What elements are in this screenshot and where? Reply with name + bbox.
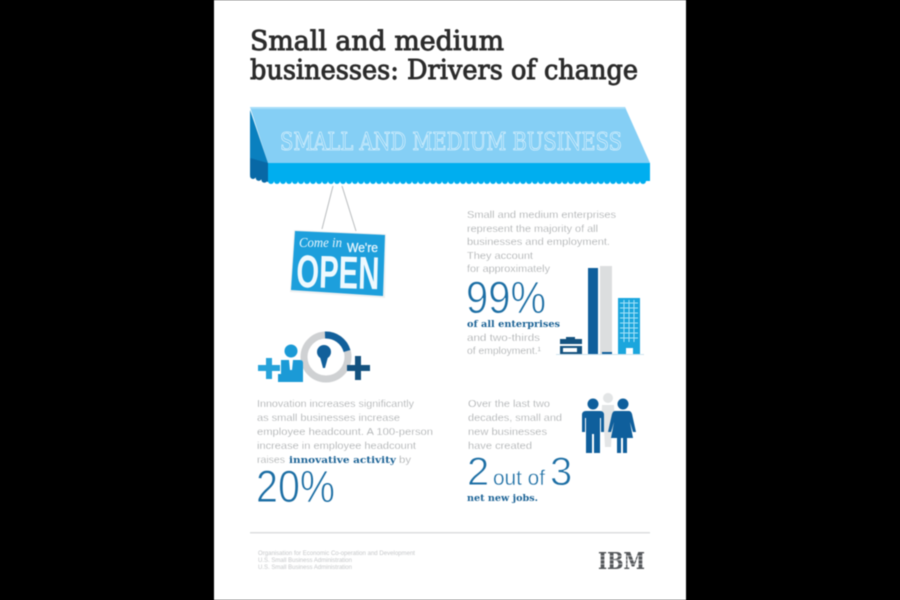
title: Small and medium xyxy=(250,26,504,57)
text: job creation xyxy=(468,398,562,452)
white page panel xyxy=(214,0,686,600)
stat: 2 out of 3: 3 xyxy=(550,450,572,494)
stat label: innovative activity: innovative activity xyxy=(289,455,397,466)
IBM logo: IBM xyxy=(598,548,645,575)
text: enterprises intro xyxy=(467,209,616,275)
text: innovation: raises xyxy=(257,454,285,466)
title xyxy=(250,26,638,86)
text: enterprises intro: for approximately xyxy=(467,263,551,275)
divider xyxy=(250,532,650,534)
text: enterprises intro: businesses and employment. xyxy=(467,236,610,248)
text: innovation: Innovation increases significantly xyxy=(257,398,415,410)
title: businesses: Drivers of change xyxy=(250,55,638,86)
text: enterprises intro: represent the majority of all xyxy=(467,223,598,235)
text: enterprises intro: They account xyxy=(467,250,533,262)
text: job creation: Over the last two xyxy=(468,398,550,410)
text: two-thirds of employment xyxy=(467,332,541,357)
footnotes xyxy=(258,551,415,571)
stat: 2 out of 3 xyxy=(467,450,572,494)
text: innovation: increase in employee headcount xyxy=(257,440,416,452)
text: innovation xyxy=(257,398,433,466)
stat label: net new jobs: net new jobs. xyxy=(467,493,538,504)
open sign with strings: OPEN xyxy=(296,245,380,299)
text: innovation: by xyxy=(399,454,412,466)
stat: 2 out of 3: out of xyxy=(493,467,545,490)
bar chart with buildings xyxy=(556,266,644,355)
text: job creation: decades, small and xyxy=(468,412,562,424)
text: job creation: new businesses xyxy=(468,426,547,438)
footnotes: Organisation for Economic Co-operation and Development xyxy=(258,551,415,557)
stat: 20%: 20% xyxy=(256,461,335,512)
text: innovation: as small businesses increase xyxy=(257,412,400,424)
open sign with strings: Come in xyxy=(299,236,342,251)
text: job creation: have created xyxy=(468,440,532,452)
open sign with strings xyxy=(290,186,386,299)
open sign with strings: We're xyxy=(347,240,378,255)
footnotes: U.S. Small Business Administration xyxy=(258,558,352,564)
stat label: of all enterprises: of all enterprises xyxy=(467,319,560,330)
text: two-thirds of employment: and two-thirds xyxy=(467,332,540,344)
stat: 99%: 99% xyxy=(466,272,546,323)
text: innovation: employee headcount. A 100-person xyxy=(257,426,433,438)
awning label: SMALL AND MEDIUM BUSINESS xyxy=(280,128,622,156)
awning xyxy=(250,107,650,182)
footnotes: U.S. Small Business Administration xyxy=(258,565,352,571)
text: two-thirds of employment: of employment.¹ xyxy=(467,345,541,357)
icon: employee and innovation ring xyxy=(258,335,370,382)
stat: 2 out of 3: 2 xyxy=(467,450,489,494)
text: enterprises intro: Small and medium enterprises xyxy=(467,209,616,221)
icon: people xyxy=(582,393,636,453)
